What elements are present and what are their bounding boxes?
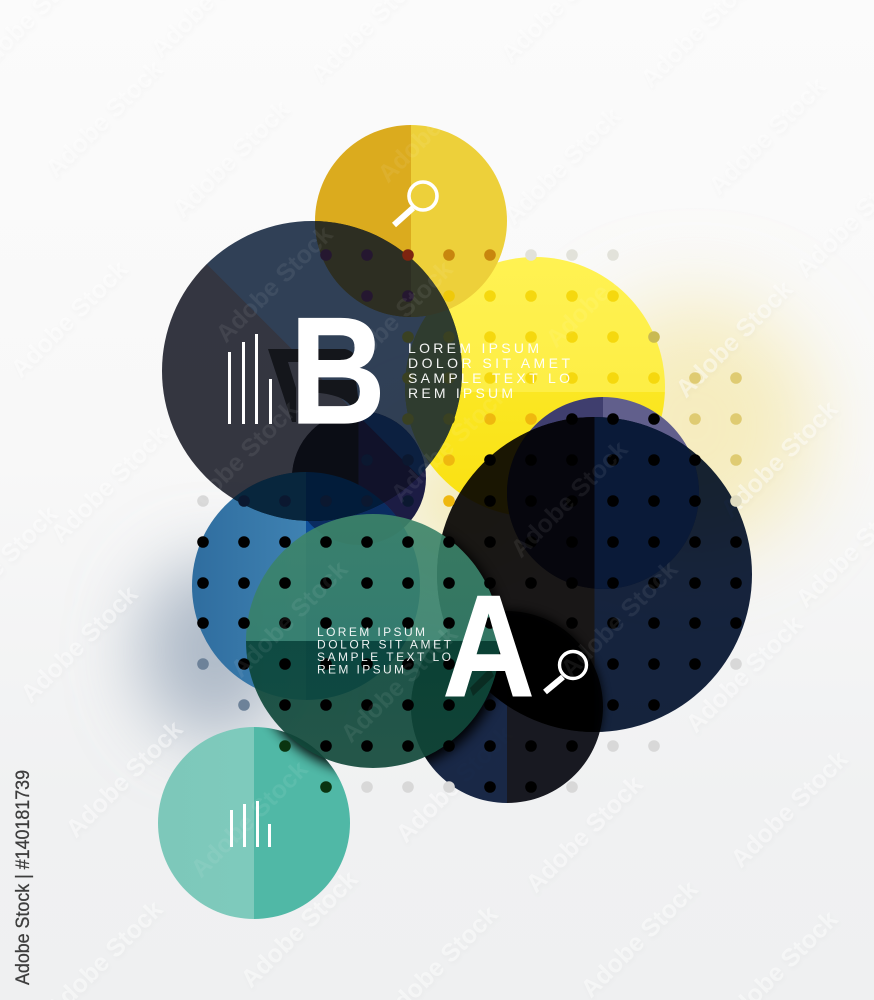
overlap: slate with yellow [405,296,462,464]
amber dots on yellow [443,290,537,507]
icon: bars on teal circle [230,801,271,847]
circle: dark slate B [162,221,462,521]
circle: blue [192,472,420,700]
black dots [197,413,742,793]
shadow: bottom dark on big dark [495,608,607,732]
overlap: slate with navy [292,412,426,521]
letter B: B [290,286,386,456]
blue shadow [140,560,290,740]
text block: upper lorem: SAMPLE TEXT LO [408,370,570,386]
text block: lower lorem: REM IPSUM [317,662,404,676]
watermark pattern on background: Adobe Stock [167,95,295,223]
dot grid [197,249,742,793]
text block: lower lorem: LOREM IPSUM [317,625,425,639]
grey dots on background [197,249,742,793]
watermark pattern on background: Adobe Stock [5,255,133,383]
yellow dots on yellow [484,290,660,384]
yellow glow [400,300,815,560]
pale dots on glow [648,331,742,507]
watermark pattern on background: Adobe Stock [670,275,798,403]
purple dots on slate and gold overlap [320,249,414,302]
text block: lower lorem [317,625,452,676]
watermark pattern over circles: Adobe Stock [505,435,633,563]
dark green dots on teal [279,740,332,793]
overlap: big dark with purple [530,417,699,589]
text block: upper lorem [408,340,570,401]
circle: gold [315,125,507,317]
watermark pattern on background: Adobe Stock [40,55,168,183]
watermark pattern on background: Adobe Stock [520,770,648,898]
circle: small navy [292,411,426,545]
overlap: slate with gold [315,221,449,317]
watermark pattern on background: Adobe Stock [45,420,173,548]
circle: yellow [405,257,665,517]
text block: upper lorem: LOREM IPSUM [408,340,539,356]
orange dots on gold [443,249,496,261]
watermark pattern on background: Adobe Stock [575,875,703,1000]
overlap: slate with blue [233,472,384,521]
watermark pattern on background: Adobe Stock [60,715,188,843]
circle: green [246,514,500,768]
stock id caption: Adobe Stock | #140181739 [13,770,34,985]
watermark pattern over circles [175,60,683,883]
icon: magnifier on gold circle [394,182,437,225]
watermark pattern over circles: Adobe Stock [335,620,463,748]
circle: bottom dark [411,611,603,803]
watermark pattern over circles: Adobe Stock [540,225,668,353]
text block: upper lorem: DOLOR SIT AMET [408,355,570,371]
watermark pattern on background: Adobe Stock [725,745,853,873]
circle: teal [158,727,350,919]
watermark pattern over circles: Adobe Stock [210,220,338,348]
overlap: blue with navy [308,503,396,528]
blue-grey dots on shadow [197,658,250,711]
olive dots on slate and yellow overlap [402,331,455,425]
watermark pattern on background: Adobe Stock [680,610,808,738]
watermark pattern on background: Adobe Stock [15,580,143,708]
letter B fold shadow [268,349,359,422]
red dot on edge [402,249,414,261]
watermark pattern over circles: Adobe Stock [555,555,683,683]
watermark pattern on background: Adobe Stock [703,72,831,200]
watermark pattern on background: Adobe Stock [235,865,363,993]
watermark pattern on background: Adobe Stock [390,720,518,848]
watermark pattern over circles: Adobe Stock [225,555,353,683]
text block: upper lorem: REM IPSUM [408,385,513,401]
circle: purple [507,397,699,589]
watermark pattern over circles: Adobe Stock [330,255,458,383]
icon: magnifier on dark circle [545,652,586,692]
circle: big dark [437,417,752,732]
shadow: green circle [266,528,500,778]
letter A fold shadow [470,668,494,696]
watermark pattern over circles: Adobe Stock [372,60,500,188]
watermark pattern over circles: Adobe Stock [185,755,313,883]
watermark pattern on background: Adobe Stock [715,395,843,523]
icon: bars on slate circle [228,334,272,424]
text block: lower lorem: DOLOR SIT AMET [317,638,452,652]
watermark pattern over circles: Adobe Stock [175,395,303,523]
text block: lower lorem: SAMPLE TEXT LO [317,650,451,664]
dark dots on slate and blue overlap [238,454,414,507]
watermark pattern on background: Adobe Stock [498,102,626,230]
watermark pattern over circles: Adobe Stock [385,380,513,508]
letter A: A [442,564,535,727]
